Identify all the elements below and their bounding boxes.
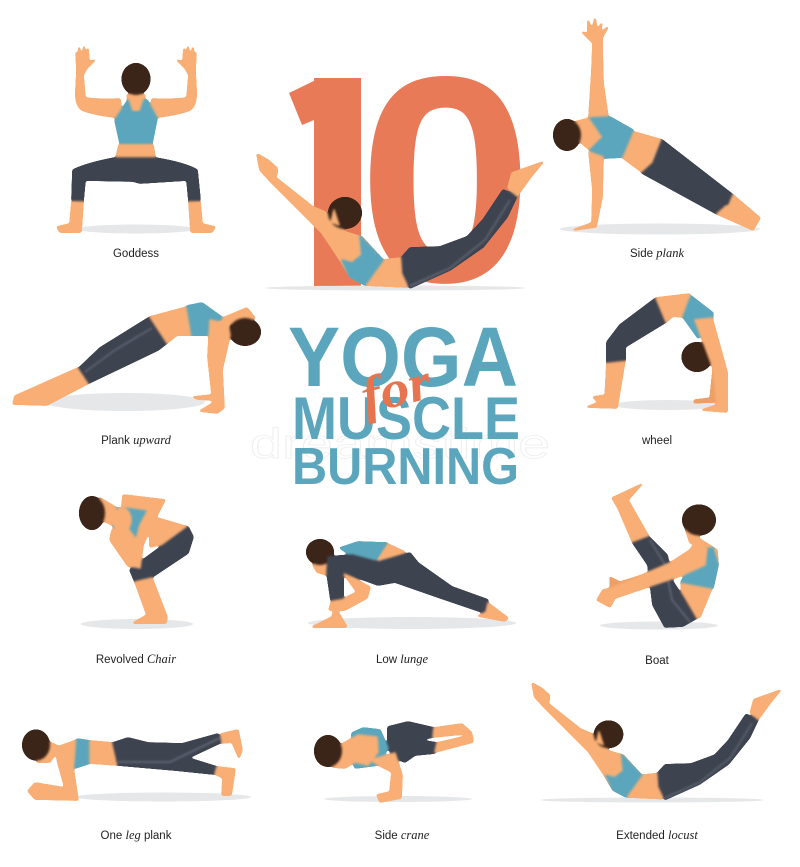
figure: [587, 294, 727, 412]
label: Goddess: [113, 248, 159, 260]
figure: [13, 303, 261, 413]
watermark: dreamstime: [250, 420, 550, 467]
panel: revolved chair: [79, 495, 193, 666]
label: Side plank: [630, 246, 684, 260]
figure: [553, 18, 760, 230]
figure: [532, 683, 781, 800]
label: Boat: [645, 655, 670, 667]
label: Side crane: [375, 828, 430, 842]
title line: yoga: YOGA: [288, 310, 518, 404]
panel: side crane: [314, 722, 473, 842]
title line: burning: BURNING: [292, 438, 519, 496]
panel: extended locust: [532, 683, 781, 842]
panel: plank upward: [13, 303, 261, 447]
figure: [79, 495, 193, 623]
figure: [597, 484, 718, 627]
big number 10: 0: [358, 15, 533, 344]
shadow: [81, 619, 193, 629]
panel: goddess: [57, 46, 215, 260]
shadow: [613, 400, 723, 410]
figure: [57, 46, 215, 232]
shadow: [540, 798, 764, 802]
panel: one leg plank: [22, 730, 251, 842]
figure: [314, 722, 473, 802]
panel: boat: [597, 484, 718, 667]
label: Low lunge: [376, 652, 428, 666]
figure: [22, 730, 242, 800]
title: [288, 310, 520, 496]
shadow: [76, 224, 196, 234]
shadow: [324, 796, 472, 802]
title line: muscle: MUSCLE: [292, 385, 520, 452]
panel: wheel: [587, 294, 727, 447]
label: Plank upward: [101, 433, 172, 447]
title word: for: for: [355, 353, 438, 426]
figure: [306, 539, 508, 627]
shadow: [560, 224, 760, 234]
shadow: [308, 617, 516, 629]
big number 10: [289, 76, 520, 286]
panel: low lunge: [306, 539, 516, 666]
shadow: [600, 622, 718, 630]
big number 10: 1: [234, 15, 416, 348]
label: One leg plank: [101, 828, 172, 842]
label: Revolved Chair: [96, 652, 176, 666]
panel: extended locust large: [257, 154, 543, 290]
shadow: [75, 792, 251, 802]
shadow: [45, 393, 205, 411]
label: Extended locust: [616, 828, 698, 842]
label: wheel: [641, 435, 672, 447]
panel: side plank: [553, 18, 760, 260]
